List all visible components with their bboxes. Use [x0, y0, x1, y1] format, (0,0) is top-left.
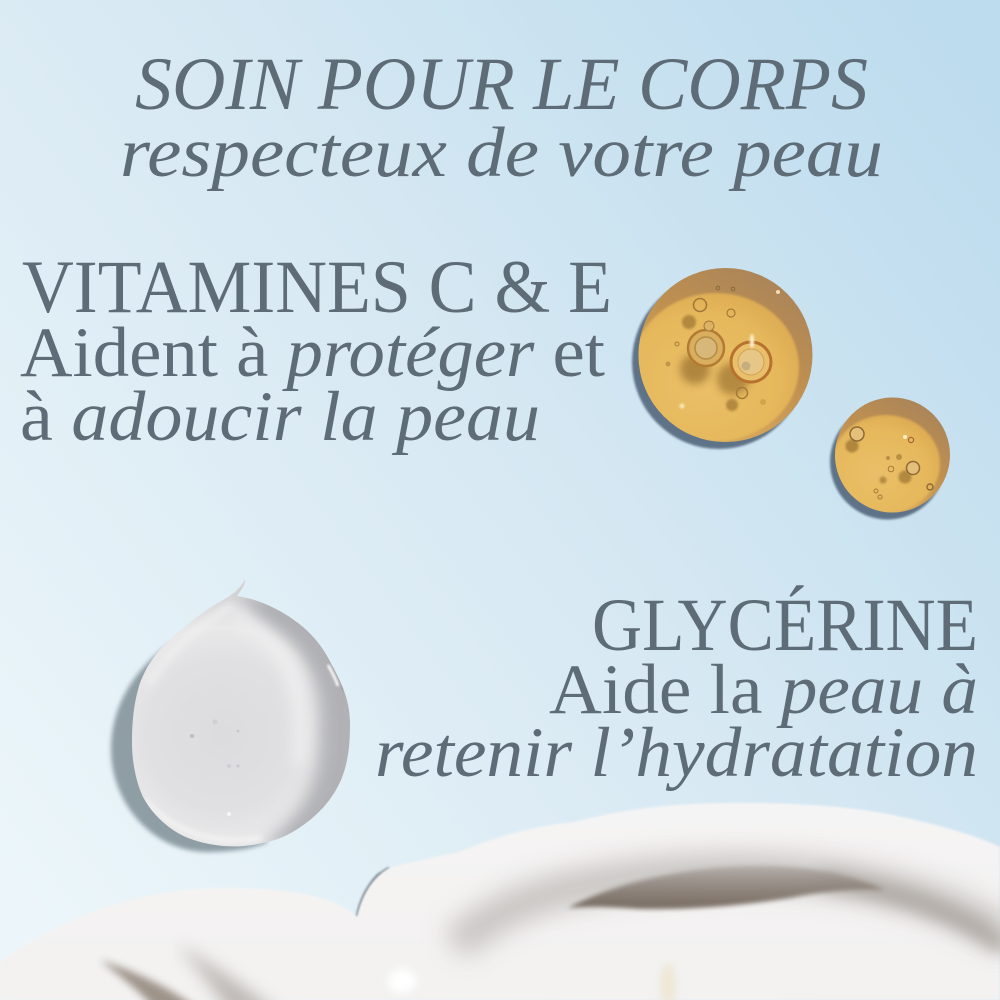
text block: glycerine	[375, 584, 978, 792]
title line 1: SOIN POUR LE CORPS	[135, 43, 868, 126]
icon: large vitamin oil drop	[632, 268, 812, 449]
glycerine line 2: retenir l’hydratation	[375, 714, 978, 792]
glycerine line 1: Aide la peau à	[549, 651, 978, 729]
text block: vitamines	[20, 246, 612, 456]
heading: glycerine: GLYCÉRINE	[592, 584, 978, 667]
cream swatch	[0, 803, 1000, 1000]
heading: vitamines: VITAMINES C & E	[22, 246, 612, 329]
title	[120, 43, 883, 192]
vitamines line 1: Aident à protéger et	[20, 314, 605, 392]
vitamines line 2: à adoucir la peau	[20, 378, 540, 456]
icon: glycerin gel drop	[111, 579, 365, 852]
icon: small vitamin oil drop	[830, 398, 950, 520]
title line 2: respecteux de votre peau	[120, 114, 883, 192]
